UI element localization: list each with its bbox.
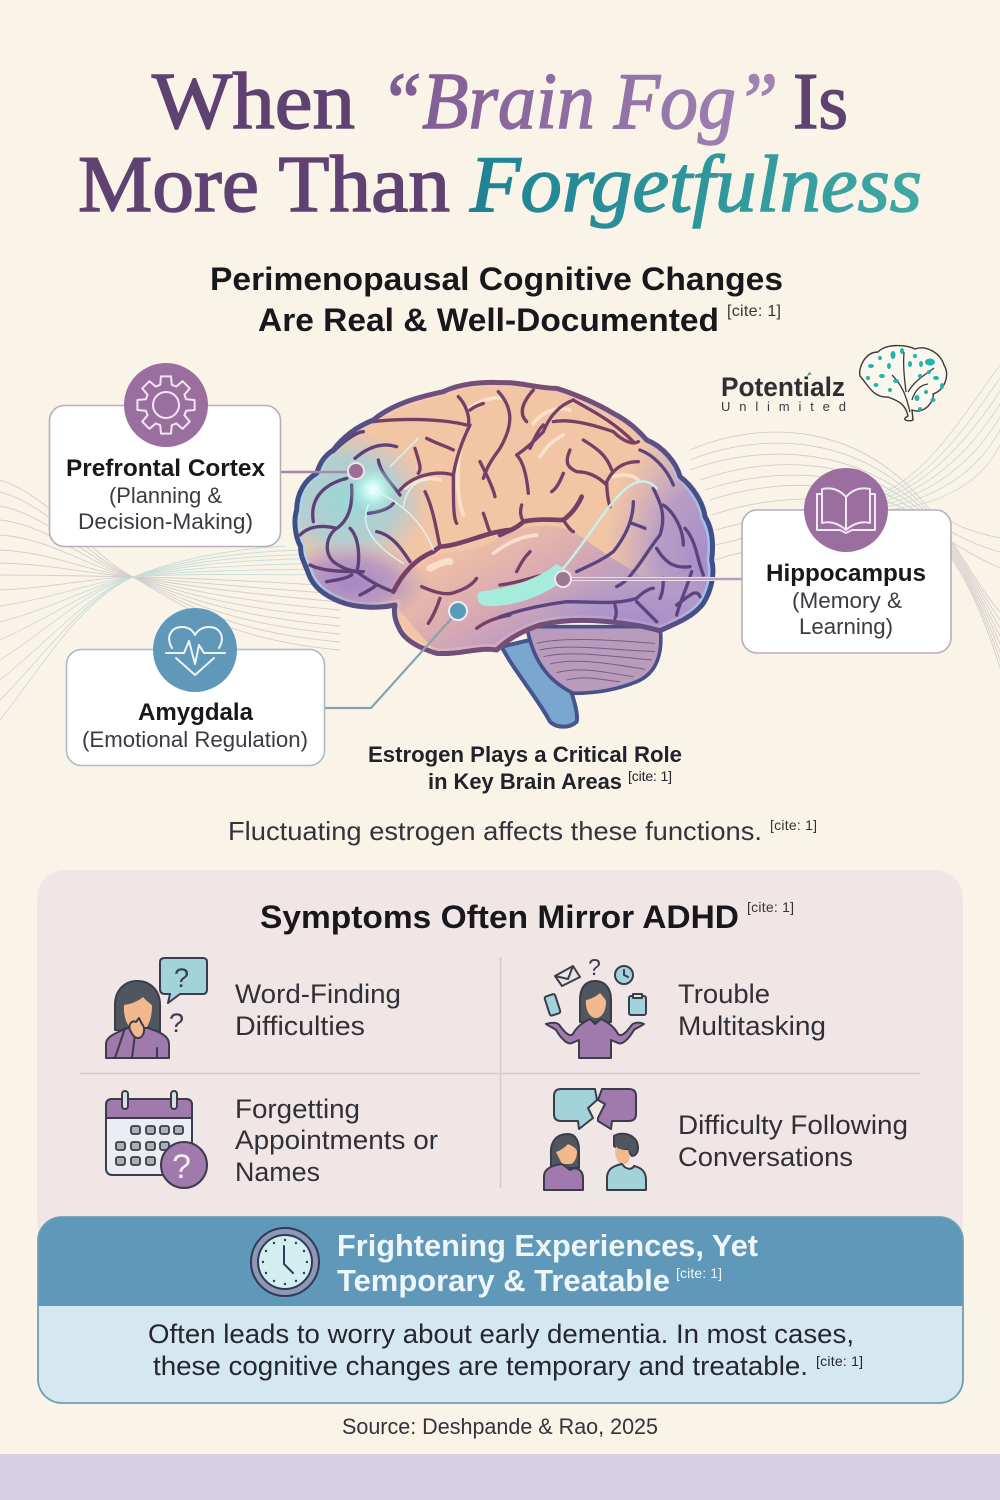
logo: [721, 346, 947, 421]
panel: hippocampus: (Memory &: [792, 588, 902, 613]
text: multitasking: Multitasking: [678, 1011, 826, 1041]
gyri highlights: [405, 398, 638, 568]
text: forgetting: Names: [235, 1157, 320, 1187]
icon: woman with question: ?: [174, 963, 189, 993]
heading: frightening experiences: Frightening Experiences, Yet: [337, 1228, 758, 1263]
title: Is: [793, 58, 848, 146]
icon: open book: [817, 488, 875, 533]
connector: amygdala: [325, 602, 467, 708]
text: conversations: [678, 1110, 908, 1172]
panel: reassurance box: [38, 1217, 963, 1403]
icon: calendar: [106, 1091, 207, 1188]
heading: frightening experiences: Temporary & Treatable: [337, 1263, 670, 1298]
title: Forgetfulness: [469, 141, 922, 229]
brain illustration: [292, 380, 716, 729]
text: reassurance: Often leads to worry about early dementia. In most cases,: [148, 1319, 854, 1349]
subtitle: Are Real & Well-Documented: [258, 302, 719, 338]
sulci right: [500, 390, 703, 622]
caption: estrogen role: [368, 742, 682, 794]
cerebellum: [527, 627, 661, 693]
heading: frightening experiences: [337, 1228, 758, 1298]
title: “Brain Fog”: [380, 58, 778, 146]
text: reassurance: these cognitive changes are temporary and treatable.: [153, 1351, 808, 1381]
icon: gear: [137, 376, 195, 434]
heading: frightening experiences: [cite: 1]: [676, 1265, 722, 1281]
text: multitasking: [678, 979, 826, 1041]
panel: prefrontal cortex: [50, 363, 280, 546]
icon: juggling tasks: ?: [588, 954, 601, 980]
heading: symptoms: Symptoms Often Mirror ADHD: [260, 899, 739, 935]
text: reassurance: [cite: 1]: [816, 1353, 863, 1369]
text: fluctuating estrogen: Fluctuating estrogen affects these functions.: [228, 816, 762, 846]
text: reassurance: [148, 1319, 863, 1381]
text: forgetting: [235, 1094, 438, 1187]
connector: prefrontal: [281, 463, 364, 479]
caption: estrogen role: [cite: 1]: [628, 768, 672, 784]
connector: hippocampus: [555, 571, 742, 587]
source: Source: Deshpande & Rao, 2025: [342, 1414, 658, 1439]
icon: juggling tasks: [544, 954, 646, 1058]
text: forgetting: Forgetting: [235, 1094, 360, 1124]
subtitle: Perimenopausal Cognitive Changes: [210, 261, 783, 297]
sulci left: [300, 392, 510, 628]
text: conversations: Difficulty Following: [678, 1110, 908, 1140]
text: word-finding: [235, 979, 401, 1041]
title: More Than: [78, 141, 450, 229]
text: forgetting: Appointments or: [235, 1125, 438, 1155]
panel: prefrontal cortex: Prefrontal Cortex: [66, 455, 266, 482]
caption: estrogen role: Estrogen Plays a Critical Role: [368, 742, 682, 767]
logo: Unlimited: [721, 399, 846, 414]
panel: hippocampus: Hippocampus: [766, 560, 926, 587]
panel: prefrontal cortex: (Planning &: [109, 483, 222, 508]
heading: symptoms: [cite: 1]: [747, 899, 794, 915]
icon: heart with pulse: [166, 627, 225, 675]
bottom band: [0, 1454, 1000, 1500]
prefrontal glow: [348, 438, 433, 563]
icon: logo brain tree: [860, 346, 947, 421]
panel: prefrontal cortex: Decision-Making): [78, 509, 253, 534]
title: [78, 58, 922, 229]
subtitle: [210, 261, 783, 338]
text: word-finding: Difficulties: [235, 1011, 365, 1041]
panel: symptoms: [37, 870, 963, 1250]
icon: broken conversation: [544, 1089, 646, 1190]
subtitle: [cite: 1]: [727, 303, 781, 320]
rim light: [295, 382, 713, 654]
hippocampus glow strand: [477, 481, 657, 606]
panel: amygdala: (Emotional Regulation): [82, 727, 308, 752]
icon: calendar: ?: [172, 1148, 191, 1186]
text: multitasking: Trouble: [678, 979, 770, 1009]
panel: amygdala: [66, 608, 324, 766]
text: conversations: Conversations: [678, 1142, 853, 1172]
cerebrum outline: [295, 382, 713, 654]
icon: woman with question: ?: [169, 1008, 184, 1038]
brain stem: [502, 640, 577, 727]
title: When: [152, 58, 355, 146]
caption: estrogen role: in Key Brain Areas: [428, 769, 622, 794]
text: word-finding: Word-Finding: [235, 979, 401, 1009]
text: fluctuating estrogen: [cite: 1]: [770, 817, 817, 833]
icon: woman with question: [106, 958, 207, 1058]
temporal lobe: [400, 526, 652, 651]
icon: clock: [251, 1228, 319, 1296]
logo: Potentialz: [721, 372, 845, 402]
panel: hippocampus: Learning): [799, 614, 893, 639]
panel: amygdala: Amygdala: [138, 699, 254, 726]
panel: hippocampus: [742, 468, 951, 653]
cerebrum: [295, 382, 713, 654]
